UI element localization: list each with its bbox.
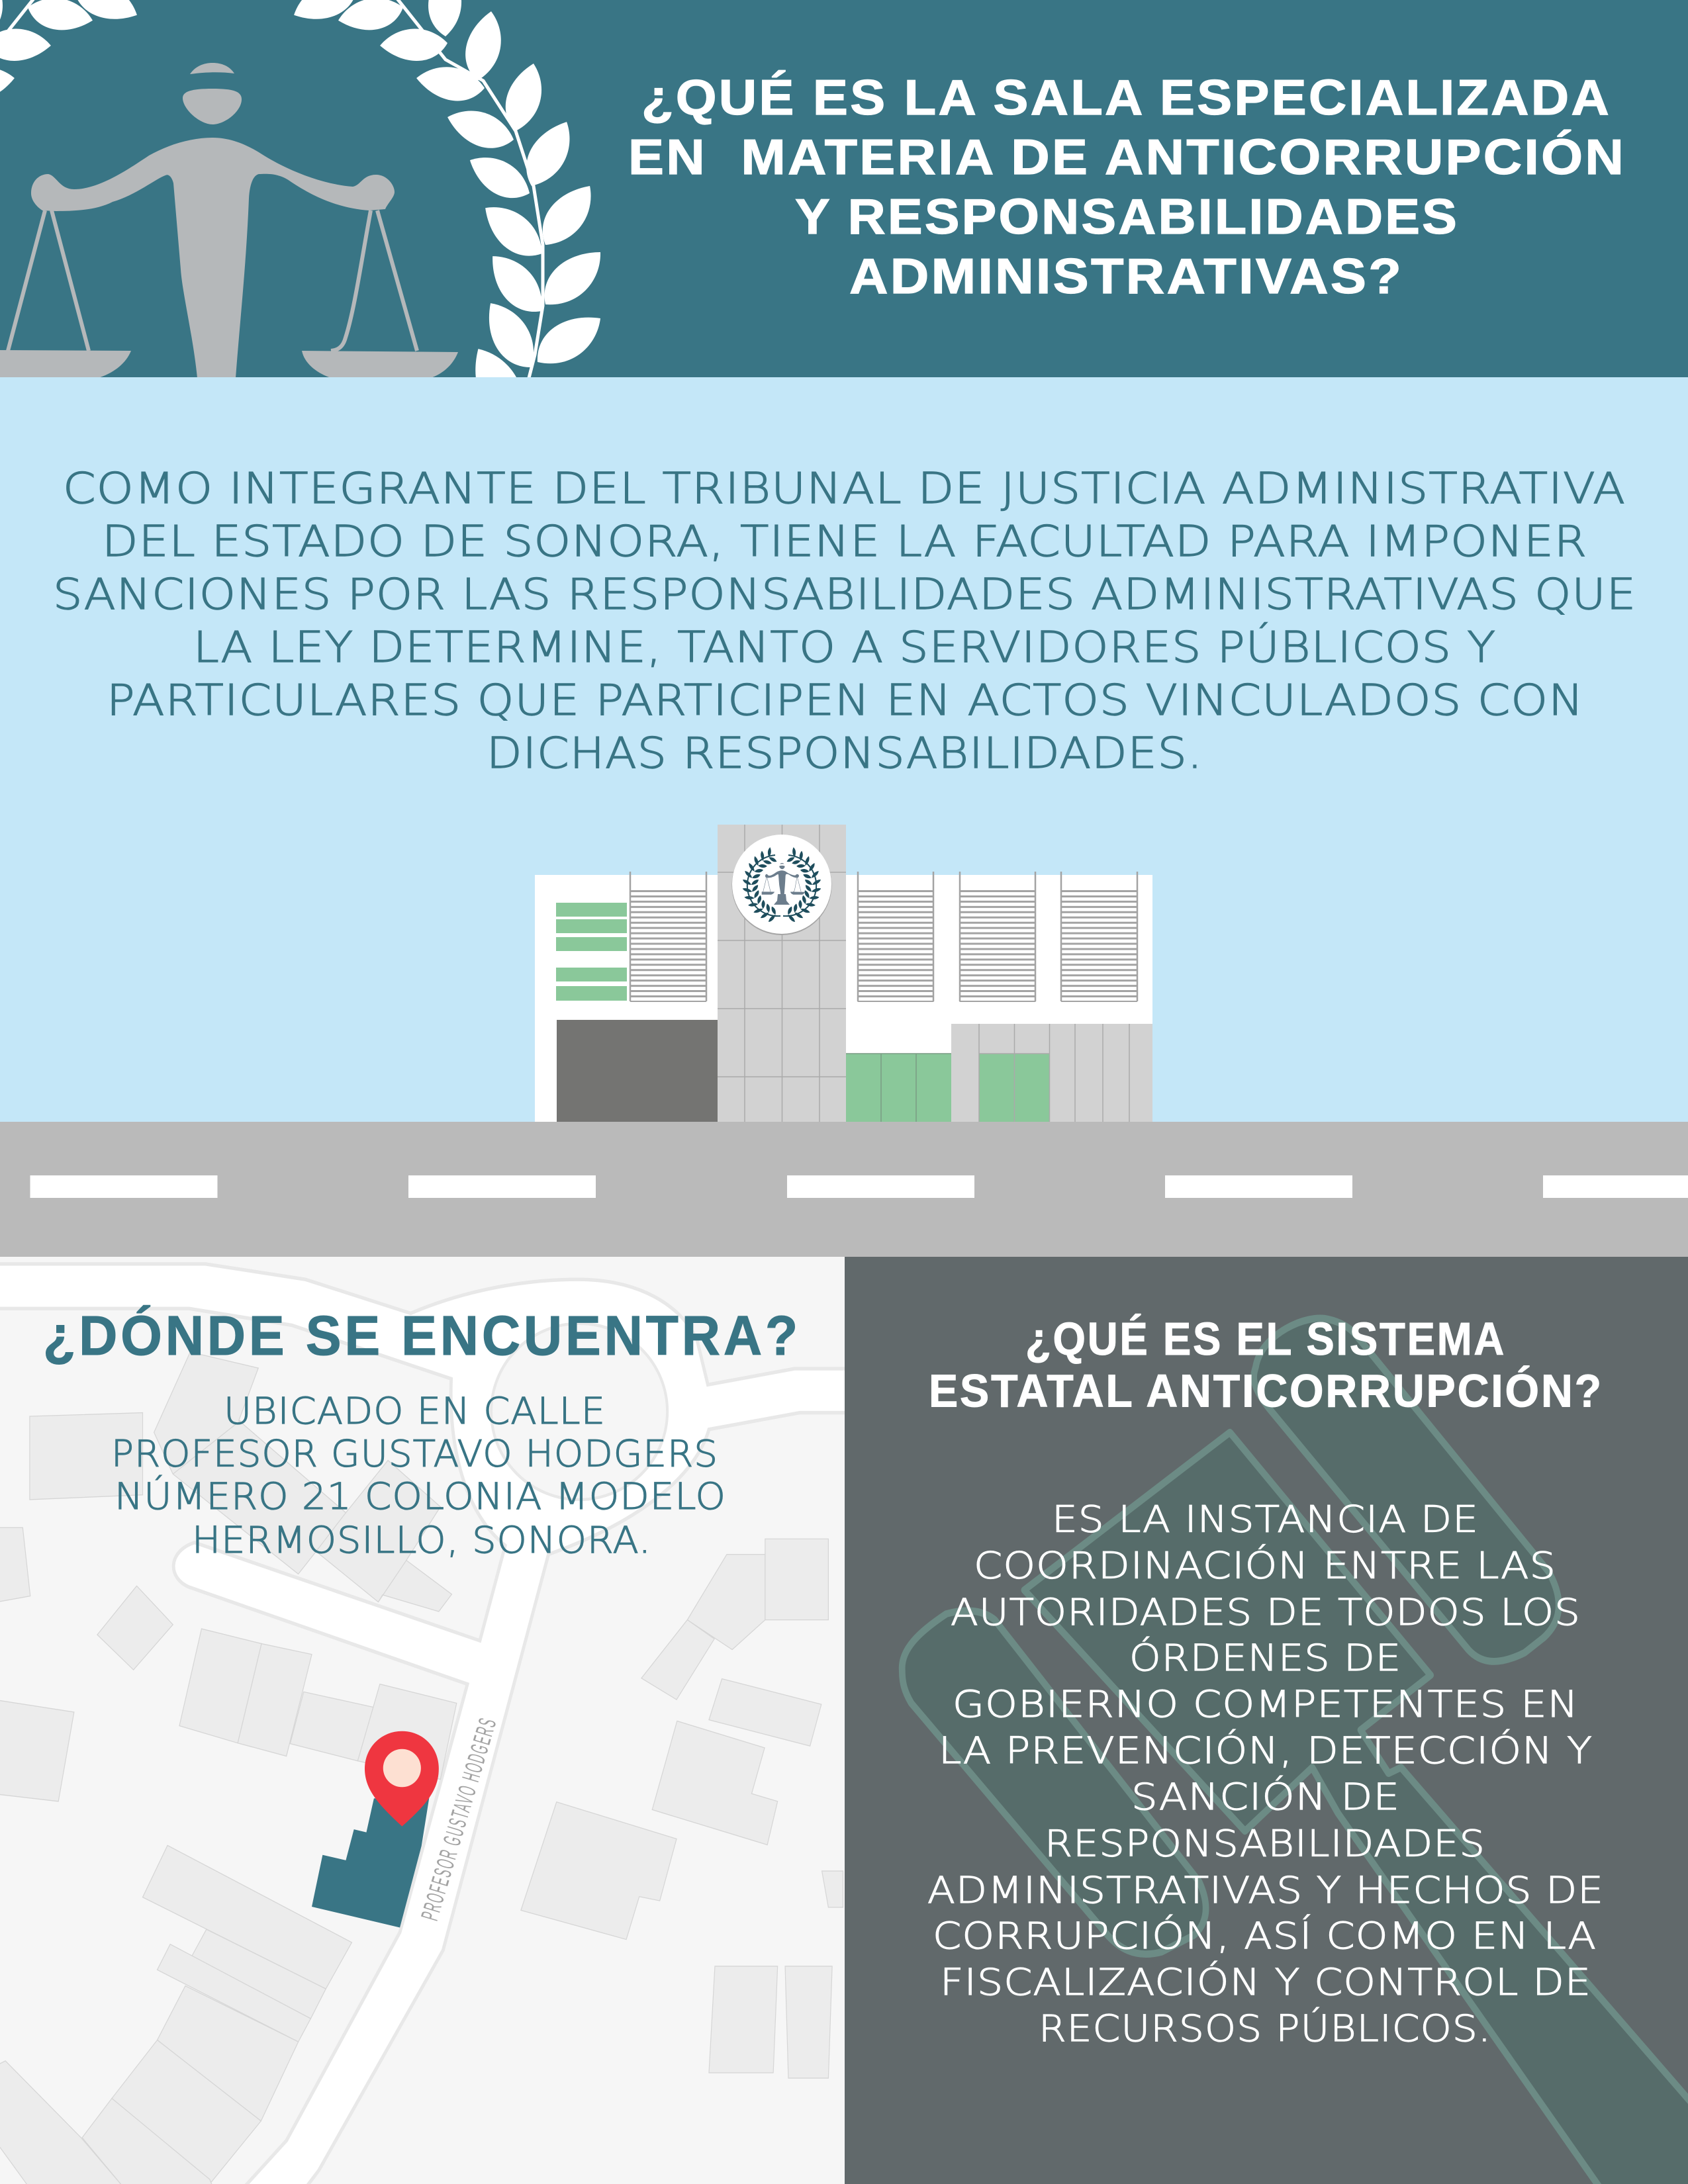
text block: address (111, 1390, 726, 1561)
title: ADMINISTRATIVAS? (849, 248, 1403, 304)
text block: definition: RECURSOS PÚBLICOS. (1039, 2007, 1491, 2050)
icon: map pin (365, 1731, 439, 1827)
text block: definition (927, 1498, 1604, 2050)
text block: description of the Sala: SANCIONES POR LAS RESPONSABILIDADES ADMINISTRATIVAS QUE (53, 570, 1636, 619)
title (628, 69, 1626, 304)
gray cladding wing (951, 1024, 1152, 1122)
road (0, 1122, 1688, 1257)
panel: sistema estatal anticorrupcion (845, 1257, 1688, 2184)
panel: light blue background (0, 377, 1688, 1122)
text block: description of the Sala: DEL ESTADO DE SONORA, TIENE LA FACULTAD PARA IMPONER (102, 518, 1587, 567)
text block: definition: ES LA INSTANCIA DE (1052, 1498, 1479, 1541)
text block: definition: FISCALIZACIÓN Y CONTROL DE (940, 1961, 1591, 2003)
title: EN MATERIA DE ANTICORRUPCIÓN (628, 129, 1626, 185)
map roads (0, 1264, 851, 2184)
icon: laurel wreath (0, 0, 612, 433)
icon: gavel watermark (902, 1318, 1688, 2184)
text block: address: PROFESOR GUSTAVO HODGERS (111, 1432, 718, 1475)
text block: definition: RESPONSABILIDADES (1045, 1823, 1485, 1865)
garage door (557, 1020, 718, 1122)
panel: location map: PROFESOR GUSTAVO HODGERS (416, 1714, 502, 1923)
heading: que es el sistema (929, 1313, 1603, 1416)
text block: definition: GOBIERNO COMPETENTES EN (953, 1683, 1579, 1725)
panel: location map (0, 1257, 851, 2184)
heading: que es el sistema: ¿QUÉ ES EL SISTEMA (1025, 1313, 1506, 1365)
text block: definition: ADMINISTRATIVAS Y HECHOS DE (927, 1869, 1604, 1911)
text block: description of the Sala: PARTICULARES QUE PARTICIPEN EN ACTOS VINCULADOS CON (107, 676, 1584, 725)
text block: definition: LA PREVENCIÓN, DETECCIÓN Y (939, 1729, 1593, 1772)
text block: description of the Sala: COMO INTEGRANTE DEL TRIBUNAL DE JUSTICIA ADMINISTRATIVA (63, 465, 1626, 514)
heading: donde se encuentra: ¿DÓNDE SE ENCUENTRA? (43, 1304, 801, 1367)
text block: address: HERMOSILLO, SONORA. (192, 1519, 651, 1561)
map buildings (0, 1352, 843, 2184)
building illustration (535, 825, 1152, 1122)
icon: justice figure with scales (0, 63, 458, 379)
panel: header band (0, 0, 1688, 377)
green entrance (846, 1054, 951, 1122)
text block: description of the Sala: LA LEY DETERMINE, TANTO A SERVIDORES PÚBLICOS Y (193, 622, 1496, 672)
text block: definition: AUTORIDADES DE TODOS LOS (951, 1591, 1581, 1633)
text block: definition: ÓRDENES DE (1129, 1637, 1401, 1679)
louvers (630, 872, 1137, 1002)
road dashes (30, 1175, 1688, 1198)
text block: description of the Sala: DICHAS RESPONSABILIDADES. (487, 729, 1203, 778)
text block: definition: COORDINACIÓN ENTRE LAS (974, 1545, 1556, 1587)
text block: address: NÚMERO 21 COLONIA MODELO (115, 1475, 726, 1518)
central tower (718, 825, 846, 1122)
green windows (556, 903, 627, 1001)
heading: que es el sistema: ESTATAL ANTICORRUPCIÓN? (929, 1365, 1603, 1416)
highlighted parcel (312, 1796, 430, 1928)
badge: round emblem (732, 835, 831, 935)
text block: definition: CORRUPCIÓN, ASÍ COMO EN LA (933, 1915, 1597, 1957)
title: Y RESPONSABILIDADES (795, 189, 1459, 244)
text block: description of the Sala (53, 465, 1636, 778)
text block: definition: SANCIÓN DE (1131, 1776, 1400, 1818)
text block: address: UBICADO EN CALLE (224, 1390, 606, 1432)
title: ¿QUÉ ES LA SALA ESPECIALIZADA (641, 69, 1611, 125)
building white facade (535, 875, 1152, 1122)
